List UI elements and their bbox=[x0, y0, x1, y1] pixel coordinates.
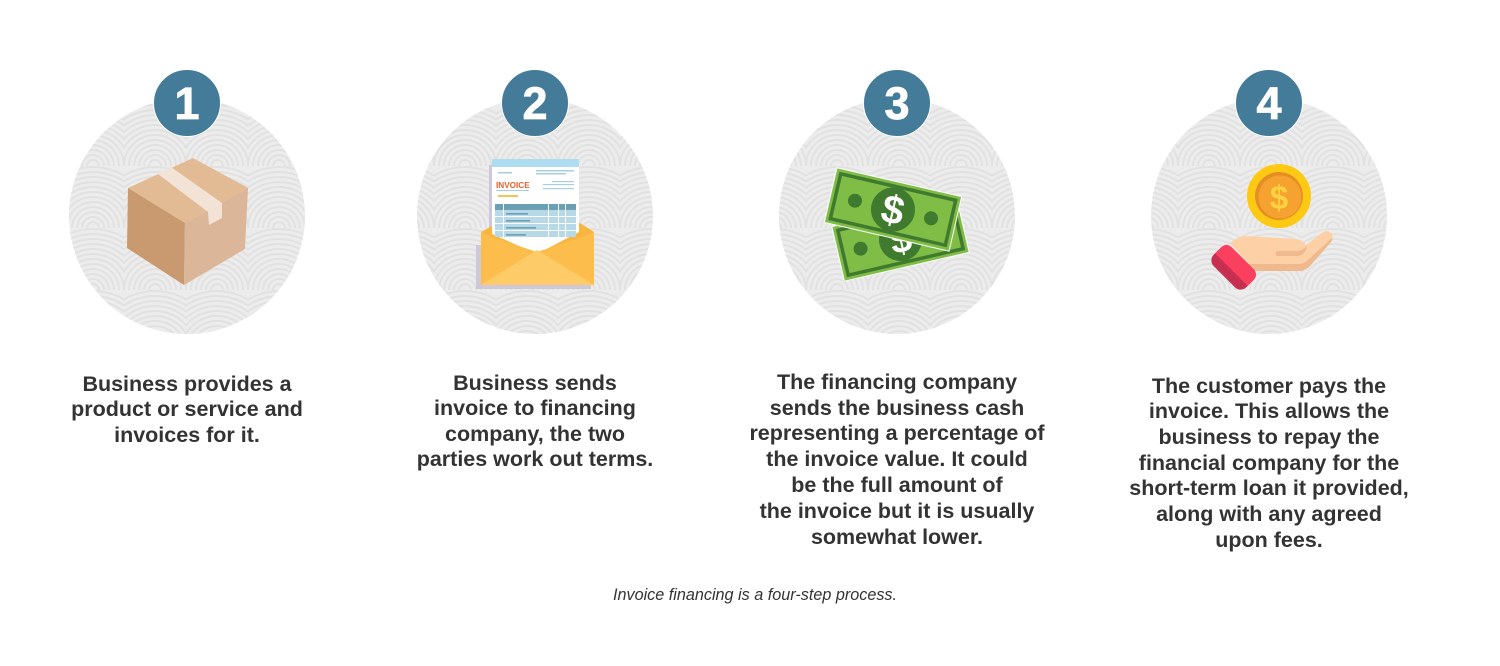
step 2 description: company, the two bbox=[445, 422, 625, 446]
step 2 description: parties work out terms. bbox=[417, 447, 653, 471]
step 3 description: The financing company bbox=[777, 370, 1017, 394]
step 3 number badge bbox=[864, 70, 930, 136]
step 4 description: short-term loan it provided, bbox=[1129, 476, 1409, 500]
icon: invoice in envelope bbox=[476, 159, 594, 289]
step 4 number badge: 4 bbox=[1256, 78, 1282, 129]
step 2 description: Business sends bbox=[453, 371, 617, 395]
step 3 bbox=[749, 70, 1045, 549]
step 4 description: business to repay the bbox=[1158, 425, 1380, 449]
step 3 number badge: 3 bbox=[884, 78, 910, 129]
step 3 description: somewhat lower. bbox=[811, 525, 983, 549]
step 4 description: along with any agreed bbox=[1156, 502, 1382, 526]
back bill bbox=[832, 198, 969, 281]
step 1 description: Business provides a bbox=[82, 372, 293, 396]
step 2 background circle bbox=[417, 98, 653, 334]
step 1 background circle bbox=[69, 98, 305, 334]
step 4 background circle bbox=[1151, 98, 1387, 334]
step 1 number badge bbox=[154, 70, 220, 136]
icon: gold coin: $ bbox=[1270, 179, 1288, 216]
step 3 description: the invoice value. It could bbox=[766, 447, 1028, 471]
step 3 description: the invoice but it is usually bbox=[760, 499, 1034, 523]
icon: gold coin bbox=[1247, 164, 1311, 228]
icon: cardboard box bbox=[127, 158, 248, 285]
step 1 description: product or service and bbox=[71, 397, 303, 421]
step 1 description: invoices for it. bbox=[114, 423, 260, 447]
step 2 bbox=[417, 70, 653, 471]
step 4 description: invoice. This allows the bbox=[1149, 399, 1389, 423]
step 4 description: upon fees. bbox=[1215, 528, 1323, 552]
step 3 background circle bbox=[779, 98, 1015, 334]
step 1 bbox=[69, 70, 305, 447]
step 2 number badge bbox=[502, 70, 568, 136]
step 3 description: sends the business cash bbox=[770, 396, 1024, 420]
step 3 description: be the full amount of bbox=[791, 473, 1004, 497]
caption: Invoice financing is a four-step process. bbox=[613, 586, 897, 604]
back bill: $ bbox=[886, 218, 916, 263]
step 4 description: The customer pays the bbox=[1152, 374, 1386, 398]
front bill bbox=[824, 168, 962, 251]
step 3 description: representing a percentage of bbox=[749, 421, 1045, 445]
step 2 number badge: 2 bbox=[522, 78, 548, 129]
icon: dollar bills bbox=[824, 168, 969, 281]
step 4 bbox=[1129, 70, 1409, 552]
step 4 description: financial company for the bbox=[1139, 451, 1399, 475]
front bill: $ bbox=[877, 187, 909, 234]
icon: open hand with red cuff bbox=[1208, 231, 1332, 293]
step 1 number badge: 1 bbox=[174, 78, 200, 129]
step 4 number badge bbox=[1236, 70, 1302, 136]
step 2 description: invoice to financing bbox=[434, 396, 636, 420]
invoice label: INVOICE bbox=[496, 181, 530, 190]
